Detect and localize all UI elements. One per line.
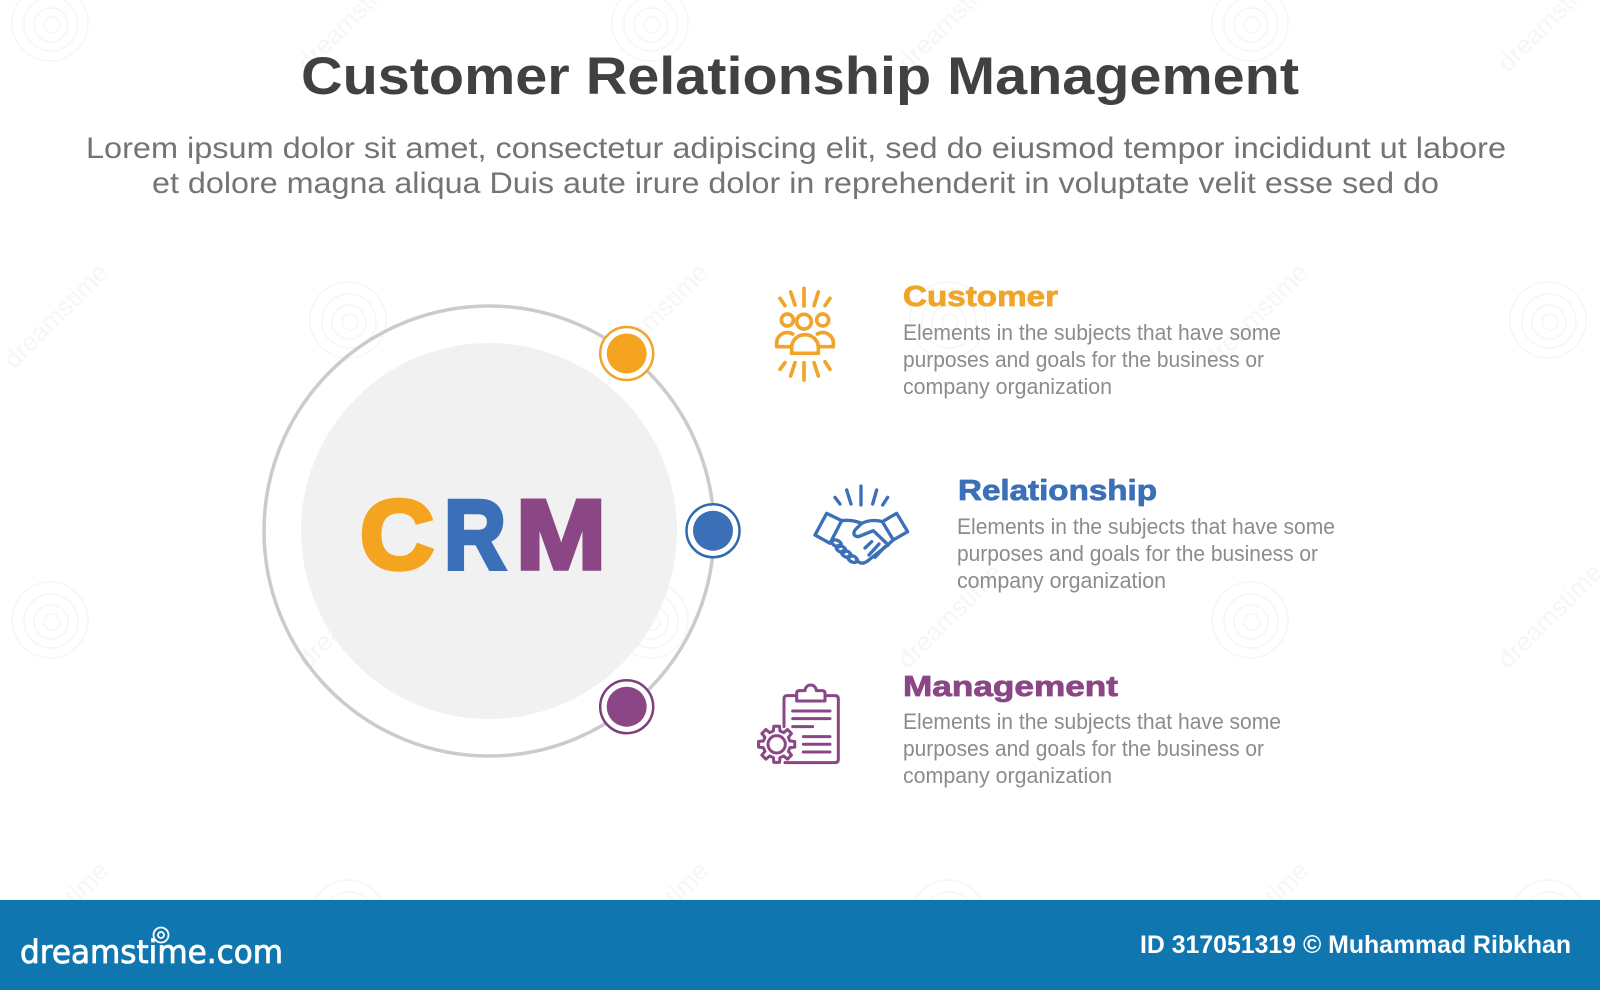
CRM wordmark: M	[516, 480, 606, 590]
heading and text: customer: company organization	[903, 374, 1112, 399]
background watermark pattern: dreamstime	[1197, 855, 1314, 972]
icon: handshake	[815, 486, 908, 564]
background watermark pattern: dreamstime	[597, 257, 714, 374]
subtitle text block: Lorem ipsum dolor sit amet, consectetur adipiscing elit, sed do eiusmod tempor incididunt ut labore	[86, 132, 1506, 165]
background watermark pattern: dreamstime	[0, 257, 114, 374]
CRM wordmark: C	[360, 480, 434, 590]
background watermark pattern: dreamstime	[597, 855, 714, 972]
heading and text: relationship: company organization	[957, 568, 1166, 593]
icon: customer group	[777, 288, 833, 380]
heading and text: customer	[903, 281, 1281, 399]
heading and text: customer: Elements in the subjects that have some	[903, 320, 1281, 345]
heading and text: management: purposes and goals for the business or	[903, 736, 1264, 761]
node: management	[600, 680, 653, 733]
CRM wordmark: R	[444, 480, 506, 590]
heading and text: relationship: Relationship	[958, 475, 1157, 507]
node: relationship	[686, 504, 740, 557]
CRM wordmark	[360, 480, 606, 590]
title: Customer Relationship Management	[301, 47, 1299, 106]
heading and text: relationship: purposes and goals for the business or	[957, 541, 1318, 566]
heading and text: relationship: Elements in the subjects that have some	[957, 514, 1335, 539]
subtitle text block	[86, 132, 1506, 200]
inner grey disc	[301, 343, 677, 719]
background watermark pattern: dreamstime	[1197, 257, 1314, 374]
icon: clipboard with gear	[759, 685, 838, 763]
heading and text: management	[903, 671, 1281, 788]
heading and text: management: company organization	[903, 763, 1112, 788]
footer credit: ID 317051319 © Muhammad Ribkhan	[1140, 931, 1571, 959]
footer logo text: dreamstime.com	[20, 933, 283, 971]
subtitle text block: et dolore magna aliqua Duis aute irure dolor in reprehenderit in voluptate velit esse sed do	[152, 167, 1439, 200]
node: customer	[600, 327, 653, 380]
footer bar	[0, 900, 1600, 990]
background watermark pattern: dreamstime	[0, 855, 114, 972]
heading and text: management: Elements in the subjects that have some	[903, 709, 1281, 734]
heading and text: management: Management	[903, 671, 1118, 703]
heading and text: customer: Customer	[903, 281, 1058, 313]
icon: logo spiral	[154, 928, 168, 942]
circular CRM diagram	[264, 306, 740, 756]
heading and text: relationship	[957, 475, 1335, 593]
background watermark pattern: dreamstime	[891, 557, 1008, 674]
heading and text: customer: purposes and goals for the business or	[903, 347, 1264, 372]
outer ring	[264, 306, 714, 756]
background watermark pattern: dreamstime	[291, 557, 408, 674]
